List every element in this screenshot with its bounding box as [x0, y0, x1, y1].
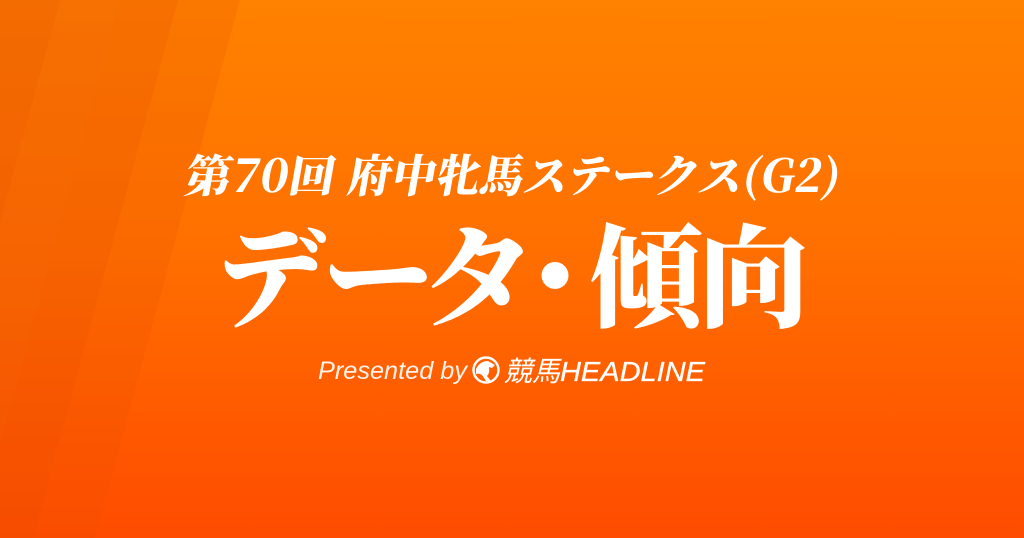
presented by text: Presented by — [318, 357, 469, 385]
icon: horse logo — [474, 358, 498, 382]
credit line — [318, 356, 705, 387]
heading: race name: 第70回 — [181, 140, 342, 205]
logo wordmark: 競馬 — [504, 356, 562, 387]
diagonal bands — [0, 0, 240, 538]
heading: race name: 府中牝馬ステークス(G2) — [344, 140, 847, 205]
logo wordmark — [504, 356, 705, 387]
logo wordmark: HEADLINE — [560, 356, 705, 387]
main title: data and trends: データ・傾向 — [214, 190, 809, 351]
